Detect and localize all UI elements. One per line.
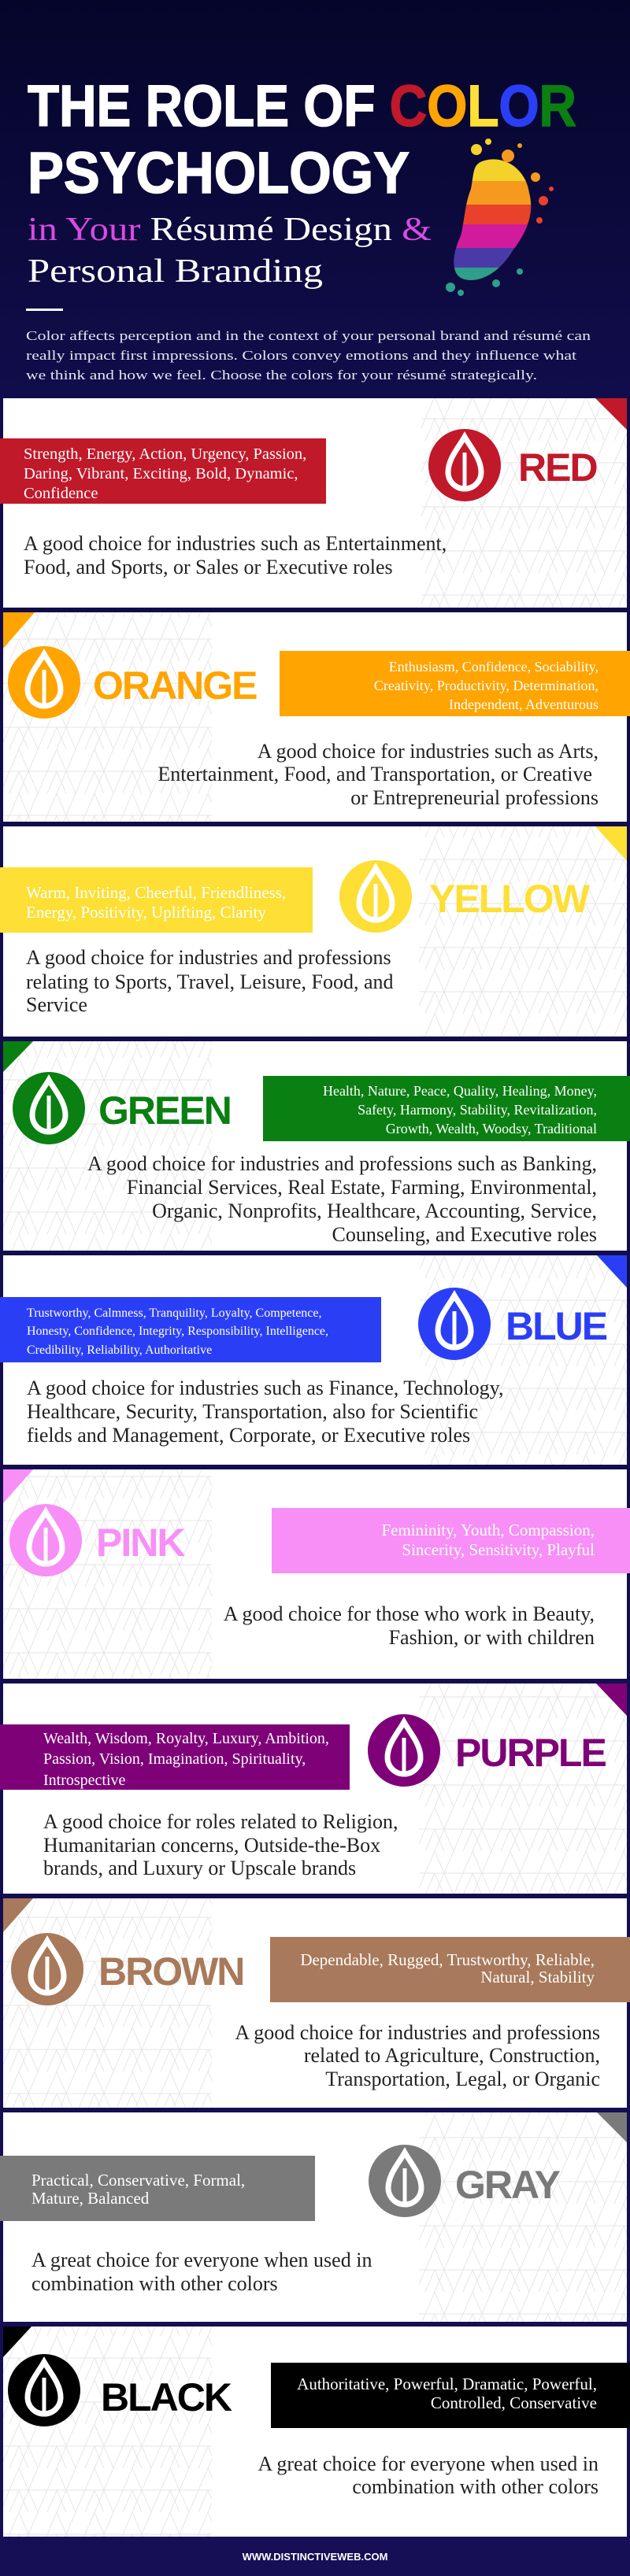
icon: purple drop — [368, 1714, 440, 1787]
tag box: brown — [270, 1937, 630, 2002]
panel: gray — [0, 2112, 627, 2322]
subtitle: Personal Branding — [28, 253, 323, 290]
text: blue description: Healthcare, Security, Transportation, also for Scientific — [27, 1400, 478, 1423]
text: green description: A good choice for industries and professions such as Banking, — [87, 1152, 597, 1175]
text: yellow description: A good choice for industries and professions — [26, 946, 391, 969]
text: blue description: A good choice for industries such as Finance, Technology, — [27, 1377, 503, 1399]
panel: orange — [3, 612, 630, 822]
text: brown description: Transportation, Legal, or Organic — [325, 2068, 600, 2090]
heading: ORANGE: ORANGE — [93, 663, 257, 708]
panel: red — [0, 398, 627, 608]
tag box: purple: Introspective — [43, 1772, 126, 1789]
panel: blue — [0, 1255, 627, 1465]
text: purple description: Humanitarian concerns, Outside-the-Box — [43, 1834, 380, 1857]
intro paragraph: Color affects perception and in the context of your personal brand and résumé can — [26, 328, 591, 343]
intro paragraph: we think and how we feel. Choose the colors for your résumé strategically. — [26, 368, 537, 383]
icon: pink drop — [9, 1504, 82, 1576]
text: brown description — [235, 2021, 600, 2090]
tag box: yellow — [0, 867, 313, 933]
text: purple description — [43, 1810, 398, 1879]
tag box: black: Controlled, Conservative — [431, 2393, 597, 2412]
tag box: green — [263, 1076, 630, 1141]
subtitle — [28, 212, 432, 290]
text: orange description — [158, 740, 598, 809]
intro paragraph: really impact first impressions. Colors convey emotions and they influence what — [26, 348, 576, 363]
tag box: black: Authoritative, Powerful, Dramatic, Powerful, — [297, 2375, 597, 2393]
tag box: green: Safety, Harmony, Stability, Revitalization, — [358, 1102, 597, 1118]
icon: orange drop — [8, 646, 80, 719]
text: pink description: Fashion, or with children — [389, 1626, 595, 1649]
tag box: brown: Dependable, Rugged, Trustworthy, Reliable, — [300, 1950, 595, 1969]
tag box: orange — [280, 651, 630, 716]
text: pink description: A good choice for those who work in Beauty, — [224, 1602, 595, 1625]
tag box: gray: Mature, Balanced — [32, 2189, 150, 2208]
text: purple description: brands, and Luxury or Upscale brands — [43, 1857, 356, 1879]
tag box: brown: Natural, Stability — [480, 1968, 595, 1987]
text: yellow description — [26, 946, 394, 1016]
text: red description: Food, and Sports, or Sales or Executive roles — [24, 556, 393, 578]
tag box: black — [271, 2363, 630, 2428]
icon: black drop — [8, 2354, 80, 2426]
tag box: green: Health, Nature, Peace, Quality, Healing, Money, — [323, 1083, 597, 1099]
tag box: pink — [272, 1508, 630, 1573]
panel: black — [3, 2327, 630, 2537]
text: red description: A good choice for industries such as Entertainment, — [24, 532, 447, 555]
icon: blue drop — [418, 1288, 491, 1360]
tag box: blue — [0, 1297, 381, 1362]
header — [0, 0, 630, 396]
tag box: gray — [0, 2156, 315, 2221]
tag box: red: Daring, Vibrant, Exciting, Bold, Dynamic, — [24, 465, 298, 482]
icon: yellow drop — [339, 860, 412, 933]
tag box: purple: Wealth, Wisdom, Royalty, Luxury, Ambition, — [43, 1730, 329, 1747]
text: green description — [87, 1152, 597, 1246]
tag box: pink: Femininity, Youth, Compassion, — [381, 1521, 595, 1539]
tag box: green: Growth, Wealth, Woodsy, Traditional — [386, 1121, 597, 1136]
text: yellow description: relating to Sports, Travel, Leisure, Food, and — [26, 970, 394, 993]
text: blue description: fields and Management, Corporate, or Executive roles — [27, 1424, 470, 1447]
panel: brown — [3, 1898, 630, 2108]
heading: BLACK: BLACK — [101, 2375, 232, 2419]
panel: yellow — [0, 826, 627, 1037]
text: red description — [24, 532, 447, 578]
tag box: orange: Creativity, Productivity, Determination, — [374, 678, 598, 693]
heading: BROWN: BROWN — [98, 1950, 243, 1994]
heading: RED: RED — [518, 445, 597, 490]
text: blue description — [27, 1377, 503, 1447]
tag box: gray: Practical, Conservative, Formal, — [32, 2171, 245, 2190]
text: gray description — [32, 2249, 372, 2295]
subtitle: in Your Résumé Design & — [28, 212, 432, 248]
text: black description: combination with other colors — [352, 2475, 598, 2498]
heading: BLUE: BLUE — [506, 1304, 607, 1348]
tag box: orange: Independent, Adventurous — [449, 697, 598, 712]
text: brown description: A good choice for industries and professions — [235, 2021, 600, 2044]
text: orange description: A good choice for industries such as Arts, — [258, 740, 598, 763]
tag box: blue: Honesty, Confidence, Integrity, Responsibility, Intelligence, — [27, 1325, 328, 1338]
intro paragraph — [26, 328, 591, 383]
text: brown description: related to Agriculture, Construction, — [304, 2044, 600, 2067]
tag box: orange: Enthusiasm, Confidence, Sociability, — [389, 659, 598, 674]
icon: rainbow brain — [441, 139, 554, 296]
text: black description — [258, 2452, 598, 2498]
tag box: pink: Sincerity, Sensitivity, Playful — [402, 1540, 595, 1559]
text: orange description: or Entrepreneurial professions — [350, 786, 598, 809]
panel: purple — [0, 1683, 627, 1894]
text: orange description: Entertainment, Food, and Transportation, or Creative — [158, 763, 592, 785]
icon: gray drop — [369, 2145, 441, 2217]
tag box: blue: Trustworthy, Calmness, Tranquility, Loyalty, Competence, — [27, 1306, 322, 1320]
icon: green drop — [13, 1072, 85, 1144]
tag box: red: Strength, Energy, Action, Urgency, Passion, — [24, 445, 306, 463]
text: purple description: A good choice for roles related to Religion, — [43, 1810, 398, 1833]
text: black description: A great choice for everyone when used in — [258, 2452, 598, 2475]
panel: green — [3, 1041, 630, 1251]
title line 1: THE ROLE OF COLOR — [28, 73, 576, 139]
text: green description: Financial Services, Real Estate, Farming, Environmental, — [127, 1176, 597, 1199]
text: green description: Counseling, and Executive roles — [332, 1223, 597, 1246]
title line 2: PSYCHOLOGY — [28, 140, 410, 205]
tag box: blue: Credibility, Reliability, Authoritative — [27, 1343, 212, 1357]
icon: red drop — [428, 429, 501, 501]
heading: YELLOW: YELLOW — [429, 877, 591, 921]
tag box: red — [0, 438, 326, 504]
heading: PINK: PINK — [96, 1521, 185, 1565]
text: green description: Organic, Nonprofits, Healthcare, Accounting, Service, — [152, 1199, 597, 1222]
heading: GREEN: GREEN — [98, 1088, 231, 1133]
text: yellow description: Service — [26, 993, 87, 1016]
text: pink description — [224, 1602, 595, 1649]
panel: pink — [3, 1469, 630, 1679]
tag box: yellow: Warm, Inviting, Cheerful, Friendliness, — [26, 883, 286, 902]
text: gray description: combination with other colors — [32, 2272, 278, 2295]
tag box: purple: Passion, Vision, Imagination, Spirituality, — [43, 1750, 306, 1768]
tag box: red: Confidence — [24, 485, 98, 502]
tag box: purple — [0, 1724, 350, 1790]
footer: WWW.DISTINCTIVEWEB.COM — [243, 2551, 387, 2563]
tag box: yellow: Energy, Positivity, Uplifting, Clarity — [26, 903, 266, 922]
icon: brown drop — [11, 1933, 83, 2005]
heading: PURPLE: PURPLE — [455, 1731, 606, 1775]
text: gray description: A great choice for everyone when used in — [32, 2249, 372, 2271]
heading: GRAY: GRAY — [455, 2163, 561, 2207]
